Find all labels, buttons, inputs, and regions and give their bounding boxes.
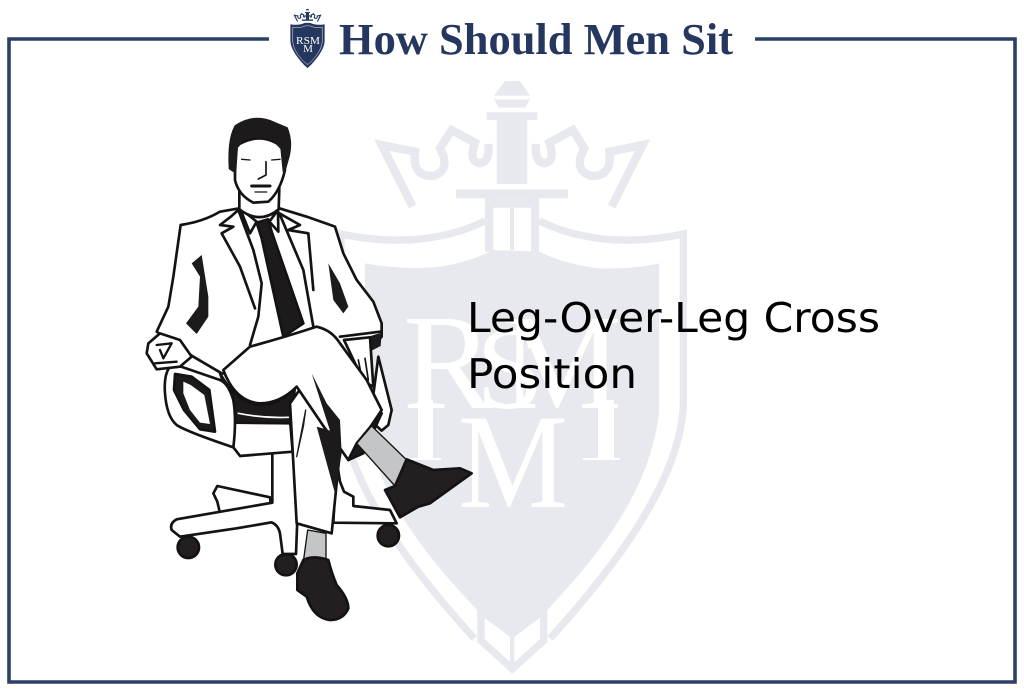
watermark: RSM monogram: M bbox=[458, 388, 568, 537]
body text: position name bbox=[467, 294, 880, 398]
tie bbox=[257, 219, 303, 337]
office chair bbox=[165, 357, 399, 575]
title: How Should Men Sit bbox=[339, 15, 733, 64]
crest: monogram letters bbox=[296, 35, 320, 55]
watermark: RSM monogram: S bbox=[476, 303, 544, 434]
crest: monogram letters: M bbox=[303, 43, 313, 55]
left hand on armrest bbox=[147, 333, 192, 369]
foot: planted leg shoe and sock bbox=[297, 530, 348, 620]
crest: monogram letters: RSM bbox=[296, 35, 320, 47]
foot: crossed leg sock and shoe bbox=[348, 413, 472, 517]
watermark: RSM monogram: R bbox=[403, 288, 494, 438]
head bbox=[230, 119, 290, 217]
crest: crown and sword bbox=[290, 9, 325, 68]
text line 2: Position bbox=[467, 350, 637, 398]
shirt collar bbox=[240, 208, 278, 233]
watermark: sword, crown and shield shapes bbox=[341, 81, 683, 670]
trouser: crossed leg bbox=[223, 327, 382, 493]
trouser: planted leg bbox=[290, 380, 340, 533]
header logo: crest bbox=[290, 9, 325, 68]
figure: seated man on office chair bbox=[147, 119, 472, 620]
watermark: RSM monogram bbox=[403, 288, 622, 537]
right hand bbox=[344, 337, 373, 387]
watermark: RSM monogram: M bbox=[501, 288, 622, 438]
jacket bbox=[157, 208, 382, 377]
watermark: shield logo bbox=[341, 81, 683, 670]
text line 1: Leg-Over-Leg Cross bbox=[467, 294, 880, 342]
